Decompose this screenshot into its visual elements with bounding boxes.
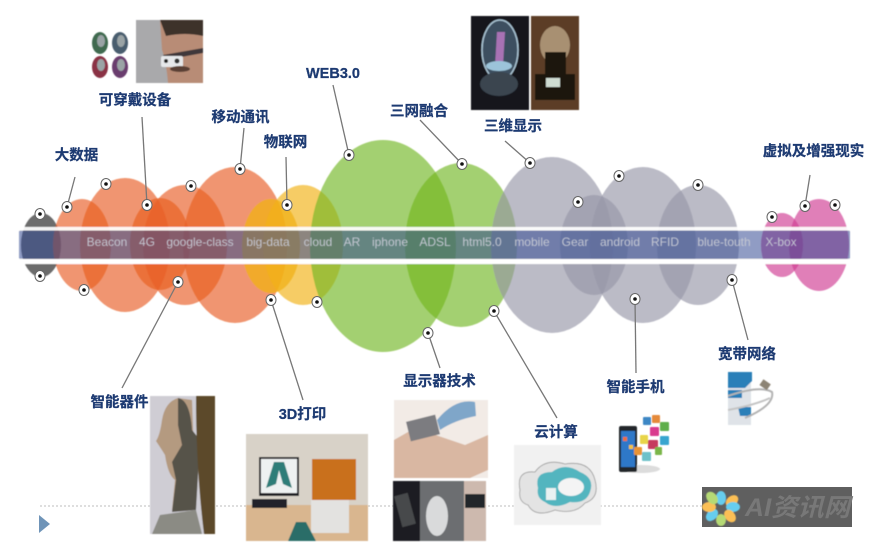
callout: 大数据: [55, 146, 98, 212]
band labels: RFID: [651, 235, 679, 249]
band labels: big-data: [246, 235, 290, 249]
callout: 可穿戴设备: [99, 91, 172, 210]
image: smart rings: [92, 32, 128, 78]
callout: 三网融合: 三网融合: [390, 102, 448, 120]
callout: 云计算: [489, 306, 578, 441]
callout: 云计算: 云计算: [534, 423, 578, 441]
callout: 智能器件: 智能器件: [90, 393, 148, 411]
callout: 移动通讯: [212, 109, 270, 174]
image: smart glasses: [136, 20, 203, 83]
icon: play triangle: [39, 515, 50, 533]
callout: 显示器技术: 显示器技术: [403, 373, 476, 390]
callout: 大数据: 大数据: [55, 146, 98, 164]
image: broadband cable: [728, 372, 772, 425]
callout: 宽带网络: [718, 274, 776, 363]
callout: 物联网: 物联网: [264, 133, 307, 151]
band labels: iphone: [372, 235, 408, 249]
watermark: AI资讯网: AI资讯网: [744, 494, 854, 522]
callout: 可穿戴设备: 可穿戴设备: [99, 91, 172, 109]
callout: 三网融合: [390, 102, 467, 170]
band: technology strip: [18, 227, 851, 264]
callout: WEB3.0: WEB3.0: [306, 66, 360, 82]
bubble chart: [18, 140, 851, 352]
band labels: 4G: [139, 235, 155, 249]
callout: WEB3.0: [306, 66, 360, 160]
band labels: ADSL: [419, 235, 451, 249]
image: wearable statue: [150, 396, 215, 534]
callout: 3D打印: [266, 294, 326, 423]
band labels: blue-touth: [697, 235, 751, 249]
callout: 智能手机: [606, 294, 665, 396]
callout: 虚拟及增强现实: 虚拟及增强现实: [763, 142, 864, 160]
callout: 物联网: [264, 133, 307, 210]
band labels: android: [600, 235, 640, 249]
callout: 三维显示: [484, 117, 542, 168]
bubbles: orange group: [53, 167, 287, 323]
bubble edge markers: [35, 170, 840, 308]
callout: 智能手机: 智能手机: [606, 378, 665, 396]
bubbles: green group: [310, 140, 517, 352]
image: 3D printer: [246, 434, 368, 541]
callout: 三维显示: 三维显示: [484, 117, 542, 135]
bubbles: pink group: [761, 199, 849, 291]
bubble: dark grey: [21, 213, 61, 277]
callout: 移动通讯: 移动通讯: [212, 109, 270, 126]
callout: 虚拟及增强现实: [763, 142, 864, 212]
band labels: Beacon: [87, 235, 127, 249]
image: cloud computing: [514, 445, 601, 525]
watermark: AI资讯网: [702, 487, 854, 527]
band labels: html5.0: [462, 235, 502, 249]
image: curved watch: [393, 481, 486, 541]
callout: 宽带网络: 宽带网络: [718, 345, 776, 363]
image: 3D display: [471, 16, 579, 110]
callout: 智能器件: [90, 276, 183, 411]
image: smartphone apps: [619, 415, 669, 473]
bubbles: yellow group: [242, 185, 343, 305]
band labels: mobile: [514, 235, 550, 249]
callout: 显示器技术: [403, 328, 476, 390]
band labels: cloud: [304, 235, 332, 249]
band labels: AR: [344, 235, 361, 249]
icon: flower logo: [702, 489, 741, 526]
band labels: google-class: [166, 235, 234, 249]
band labels: X-box: [765, 235, 797, 249]
callout: 3D打印: 3D打印: [279, 405, 326, 423]
bubbles: grey group: [491, 157, 739, 333]
band labels: [87, 235, 797, 249]
band labels: Gear: [562, 235, 588, 249]
timeline dotted line: [40, 505, 702, 507]
image: flexible display: [394, 400, 488, 478]
